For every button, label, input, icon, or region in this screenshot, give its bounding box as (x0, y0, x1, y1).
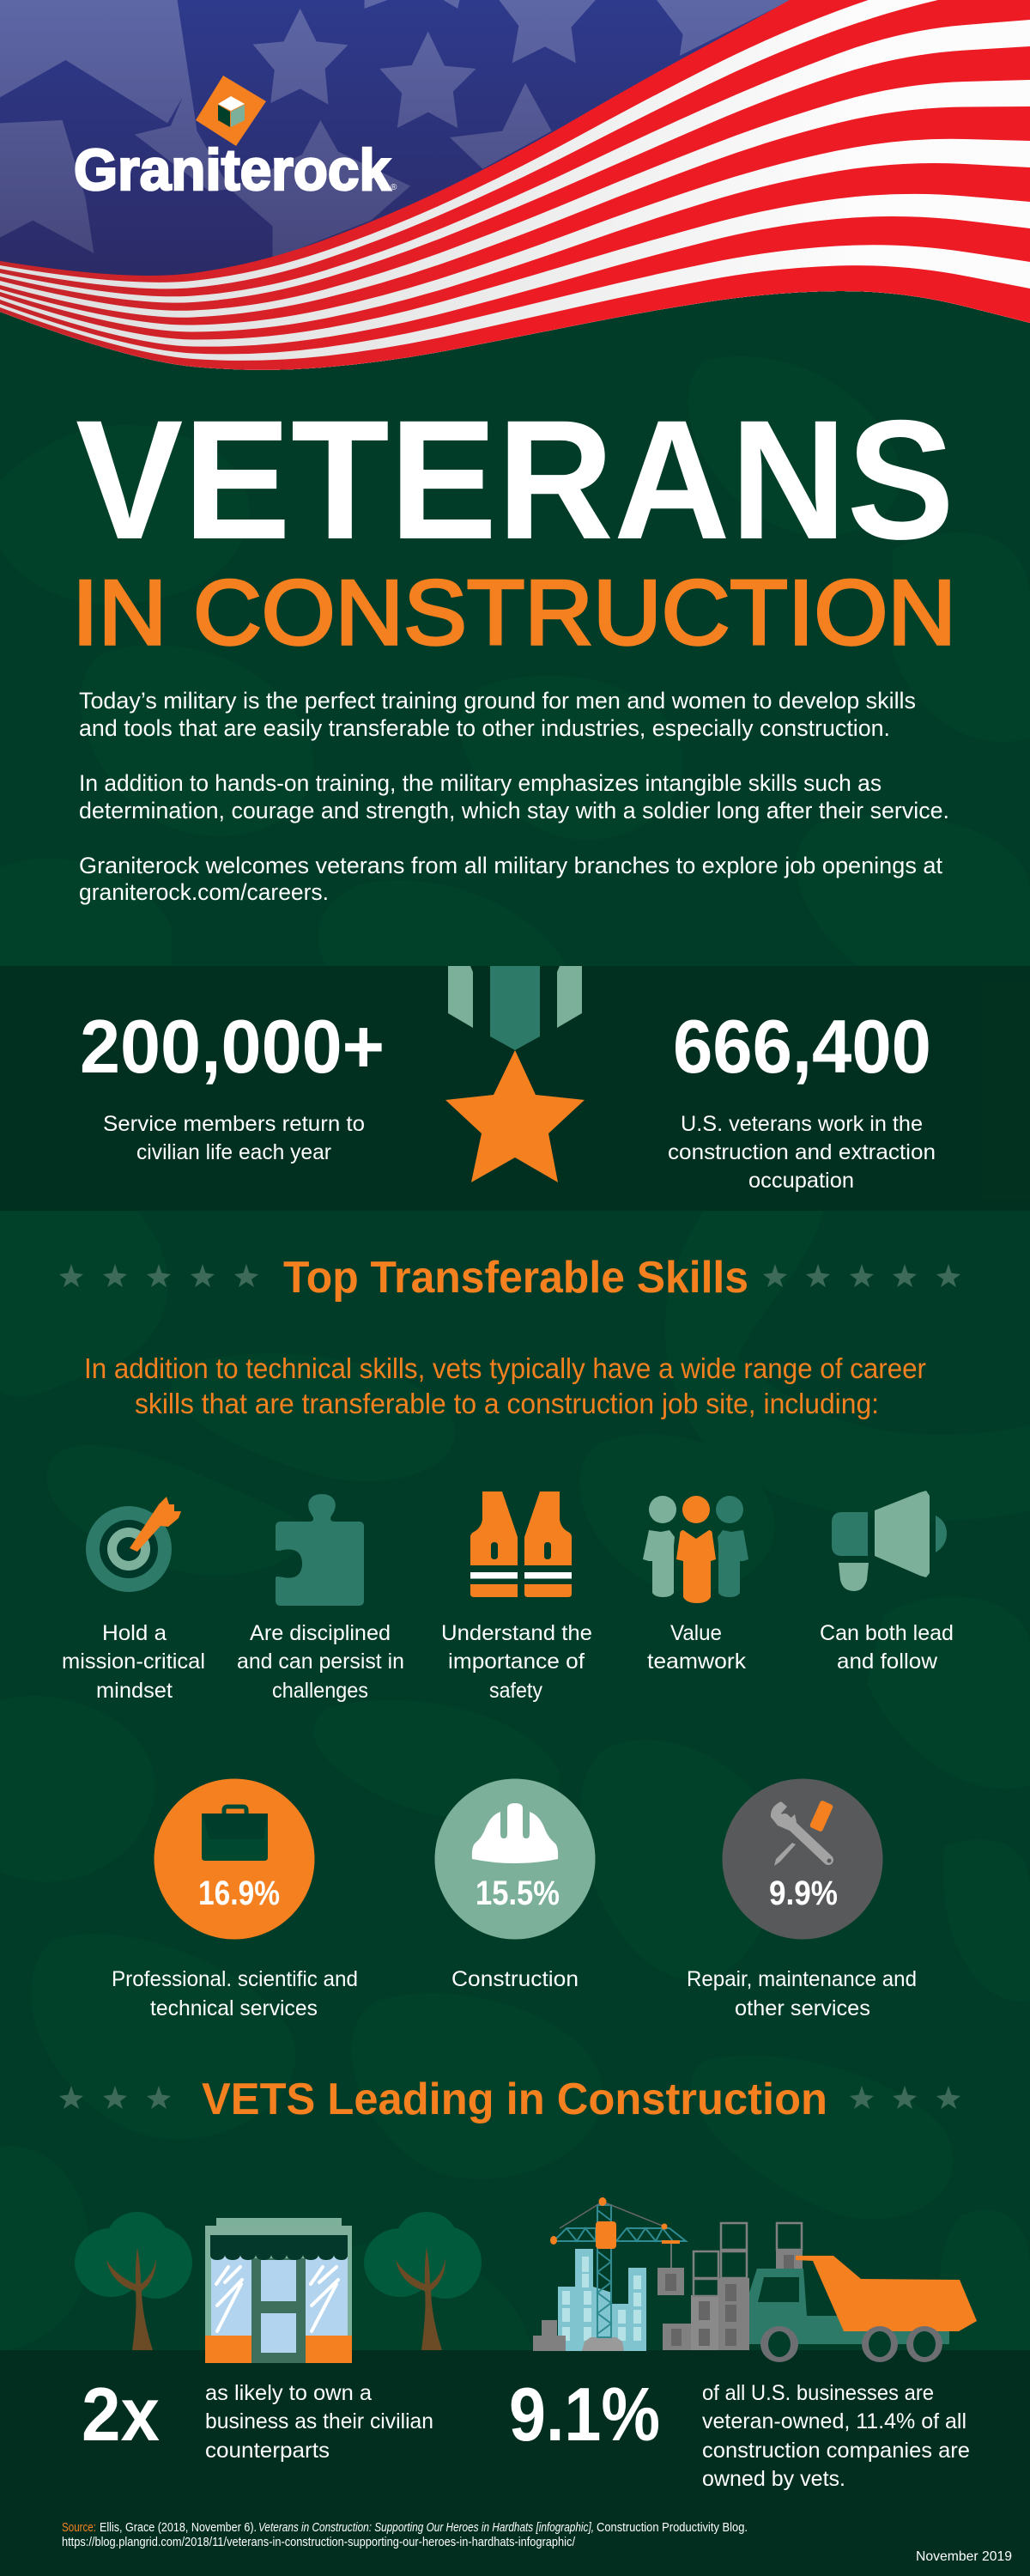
skill: discipline: and can persist in (237, 1649, 404, 1674)
panel: bottom band (0, 2350, 1030, 2576)
stat: 2x: business as their civilian (205, 2409, 433, 2433)
skill: lead and follow (820, 1491, 954, 1674)
heading: top transferable skills (59, 1253, 960, 1303)
skill: mission-critical mindset: Hold a (102, 1621, 167, 1645)
icon: medal (445, 966, 585, 1182)
intro text: graniterock.com/careers. (79, 879, 329, 905)
stat: 200,000+: 200,000+ (80, 1004, 385, 1089)
icon: team of three (643, 1496, 748, 1603)
tower crane (550, 2197, 686, 2337)
skill: safety (441, 1492, 592, 1703)
stat: 9.1%: 9.1% (509, 2372, 660, 2457)
skill: discipline: challenges (272, 1679, 368, 1703)
logo: Graniterock: ® (391, 183, 397, 192)
stat: 9.1%: of all U.S. businesses are (702, 2381, 934, 2405)
intro text (79, 688, 949, 905)
intro text: Today’s military is the perfect training ground for men and women to develop skills (79, 688, 916, 714)
source note: Construction Productivity Blog. (597, 2521, 748, 2535)
stat: 2x (82, 2372, 433, 2463)
skill: teamwork: Value (670, 1621, 722, 1645)
stat circle: repair (687, 1779, 917, 2020)
title: VETERANS (76, 385, 954, 574)
icon: megaphone (832, 1491, 947, 1591)
source note: Veterans in Construction: Supporting Our Heroes in Hardhats [infographic], (258, 2521, 594, 2535)
stat circle: professional services (112, 1779, 358, 2020)
icon: puzzle piece (276, 1494, 364, 1606)
stat circle: construction: 15.5% (476, 1874, 560, 1912)
source note (62, 2521, 748, 2549)
date: November 2019 (916, 2549, 1012, 2564)
illustration: construction site (533, 2197, 977, 2362)
stat circle: construction: Construction (451, 1967, 579, 1991)
heading: vets leading in construction: VETS Leading in Construction (202, 2075, 827, 2124)
intro text: Graniterock welcomes veterans from all military branches to explore job openings at (79, 853, 942, 878)
skills intro text: skills that are transferable to a construction job site, including: (135, 1388, 879, 1419)
logo: Graniterock (74, 76, 397, 203)
stat: 666,400: construction and extraction (668, 1140, 936, 1164)
skill: mission-critical mindset: mindset (96, 1679, 173, 1703)
skill: teamwork: teamwork (647, 1649, 747, 1674)
icon: briefcase (202, 1807, 268, 1861)
stat: 9.1% (509, 2372, 970, 2491)
stat circle: professional services: Professional. scientific and (112, 1967, 358, 1991)
skill: lead and follow: Can both lead (820, 1621, 954, 1645)
stat circle: professional services: 16.9% (198, 1874, 280, 1912)
stat: 2x: counterparts (205, 2439, 330, 2463)
source note: Ellis, Grace (2018, November 6). (100, 2521, 257, 2535)
title (72, 385, 956, 664)
stat circle: professional services: technical services (150, 1996, 318, 2020)
intro text: In addition to hands-on training, the military emphasizes intangible skills such as (79, 770, 882, 796)
stat: 666,400: U.S. veterans work in the (681, 1112, 923, 1136)
stat: 200,000+: civilian life each year (136, 1140, 331, 1164)
skill: teamwork (643, 1496, 748, 1674)
title: IN CONSTRUCTION (72, 561, 956, 664)
skill: safety: Understand the (441, 1621, 592, 1645)
heading: top transferable skills: Top Transferable Skills (283, 1253, 748, 1303)
stat: 666,400: occupation (748, 1169, 854, 1193)
intro text: and tools that are easily transferable to other industries, especially construction. (79, 715, 890, 741)
panel: statistics band (0, 966, 1030, 1211)
icon: target (86, 1497, 181, 1592)
red and white stripes (0, 0, 1030, 370)
icon: storefront (205, 2218, 352, 2363)
stat: 9.1%: construction companies are (702, 2439, 970, 2463)
stat: 2x: as likely to own a (205, 2381, 372, 2405)
skill: safety: importance of (448, 1649, 585, 1674)
skills intro text (84, 1352, 926, 1419)
logo: Graniterock: Graniterock (74, 137, 391, 203)
stat: 200,000+: Service members return to (103, 1112, 365, 1136)
stat: 666,400 (668, 1004, 936, 1193)
skill: discipline: Are disciplined (250, 1621, 391, 1645)
icon: right tree (364, 2212, 482, 2350)
stat circle: repair: other services (735, 1996, 870, 2020)
stat circle: repair: 9.9% (769, 1874, 838, 1912)
stat: 2x: 2x (82, 2372, 160, 2457)
intro text: determination, courage and strength, which stay with a soldier long after their service. (79, 798, 949, 823)
stat: 200,000+ (80, 1004, 385, 1164)
skill: mission-critical mindset (62, 1497, 205, 1703)
source note: https://blog.plangrid.com/2018/11/veterans-in-construction-supporting-our-heroes-in-hardhats-infographic/ (62, 2536, 576, 2549)
skills intro text: In addition to technical skills, vets typically have a wide range of career (84, 1352, 926, 1384)
stat: 9.1%: veteran-owned, 11.4% of all (702, 2409, 966, 2433)
blue star field (0, 0, 790, 276)
icon: left tree (75, 2212, 192, 2350)
skill: safety: safety (489, 1679, 542, 1703)
stat: 9.1%: owned by vets. (702, 2467, 845, 2491)
stat: 666,400: 666,400 (673, 1004, 931, 1089)
icon: hard hat (472, 1803, 558, 1863)
icon: wrench and screwdriver (771, 1800, 833, 1866)
stat circle: construction (434, 1779, 596, 1991)
stat circle: repair: Repair, maintenance and (687, 1967, 917, 1991)
skill: mission-critical mindset: mission-critical (62, 1649, 205, 1674)
flag header (0, 0, 1030, 370)
building under construction (533, 2249, 646, 2351)
skill: lead and follow: and follow (837, 1649, 938, 1674)
icon: safety vest (470, 1492, 572, 1597)
source note: Source: (62, 2521, 96, 2535)
dump truck (749, 2256, 977, 2362)
skill: discipline (237, 1494, 404, 1703)
concrete blocks (663, 2223, 803, 2350)
